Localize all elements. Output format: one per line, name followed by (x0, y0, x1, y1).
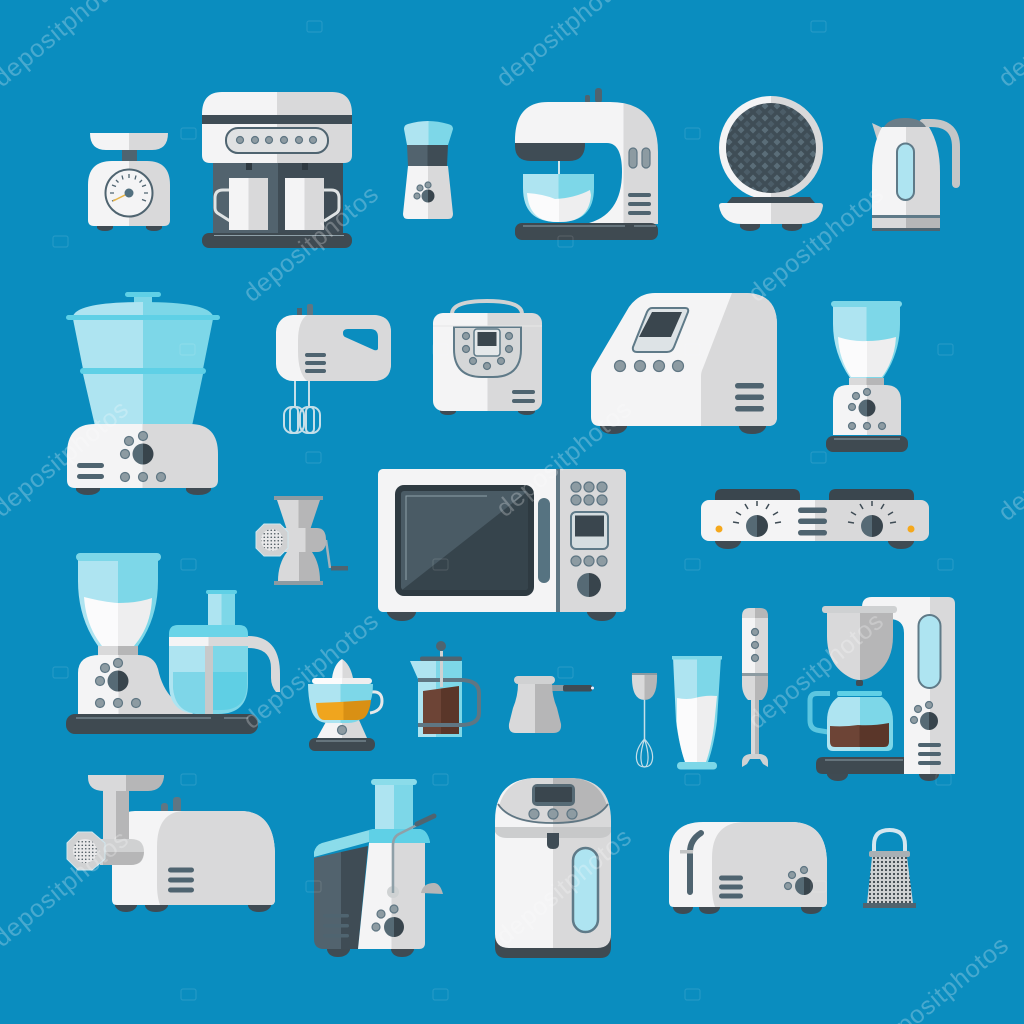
icon: coffee grinder (403, 121, 453, 219)
icon: electric meat grinder (67, 775, 275, 912)
grinder neck and pipe (103, 791, 129, 843)
processor handle (248, 636, 280, 692)
processor chute (208, 592, 235, 626)
blender jar (833, 306, 900, 378)
icon: french press (410, 641, 479, 737)
pot top panel (499, 778, 607, 824)
extractor blue top (314, 829, 430, 857)
scale dial (106, 170, 152, 216)
icon: blending cup (672, 656, 722, 770)
steamer base (76, 487, 211, 495)
processor bowl (169, 637, 248, 714)
extractor lever (387, 886, 399, 898)
icon: kitchen scale (88, 133, 170, 231)
dial ticks (733, 501, 896, 523)
microwave display (571, 512, 608, 549)
icon: citrus juicer (308, 659, 382, 751)
icon: meat grinder small (256, 496, 348, 585)
icon: grater (863, 830, 916, 908)
icon: juice extractor (314, 779, 443, 957)
mixer body (515, 102, 658, 224)
waffle plate (726, 103, 816, 193)
icon: double hot plate (701, 489, 929, 549)
steamer upper tier (73, 319, 213, 369)
icon: microwave oven (378, 469, 626, 621)
icon: bread maker (591, 293, 777, 434)
icon: double coffee machine (202, 92, 352, 248)
extractor white body (358, 843, 425, 949)
watermark: depositphotos (238, 180, 384, 308)
icon: thermo pot (495, 778, 611, 958)
bread maker screen (633, 308, 688, 352)
icon: food steamer (66, 292, 220, 495)
icon: whisk attachment (632, 673, 657, 767)
watermark: depositphotos (491, 823, 637, 951)
microwave door window (395, 485, 534, 596)
grinder plate (67, 832, 105, 870)
kettle handle (923, 123, 956, 184)
carafe (810, 694, 831, 732)
coffee maker column (862, 597, 955, 774)
scale feet (97, 225, 162, 231)
mixer head underside (515, 143, 585, 161)
icon: turkish coffee pot (509, 676, 594, 733)
lever slot (690, 833, 701, 892)
drip tray (202, 233, 352, 248)
watermark: depositphotos (238, 607, 384, 735)
watermark: depositphotos (743, 607, 889, 735)
icon: blender (826, 301, 908, 452)
processor blender jar (78, 560, 158, 646)
cup handles (215, 190, 230, 221)
filter funnel (856, 680, 863, 686)
watermark: depositphotos (491, 395, 637, 523)
grinder body (112, 811, 275, 905)
icon: multicooker (433, 301, 542, 415)
extractor spout (421, 883, 443, 894)
watermark: depositphotos (743, 180, 889, 308)
icon: electric kettle (872, 118, 956, 231)
icon: stand mixer (515, 88, 658, 240)
steamer lid (125, 292, 161, 297)
icon: food processor (66, 553, 280, 734)
icon: hand mixer (276, 304, 391, 433)
cooker control panel (454, 327, 521, 377)
beaters (284, 381, 320, 433)
mixer bowl (523, 174, 594, 222)
crank (326, 540, 330, 568)
icon: immersion blender (742, 608, 768, 767)
machine top (202, 92, 352, 115)
extractor chute (375, 784, 413, 832)
icon: drip coffee maker (810, 597, 955, 781)
icon: toaster (669, 822, 827, 914)
cups (229, 178, 268, 230)
extractor dark housing (314, 846, 368, 949)
control panel (226, 128, 328, 153)
icon: waffle maker (719, 96, 823, 231)
